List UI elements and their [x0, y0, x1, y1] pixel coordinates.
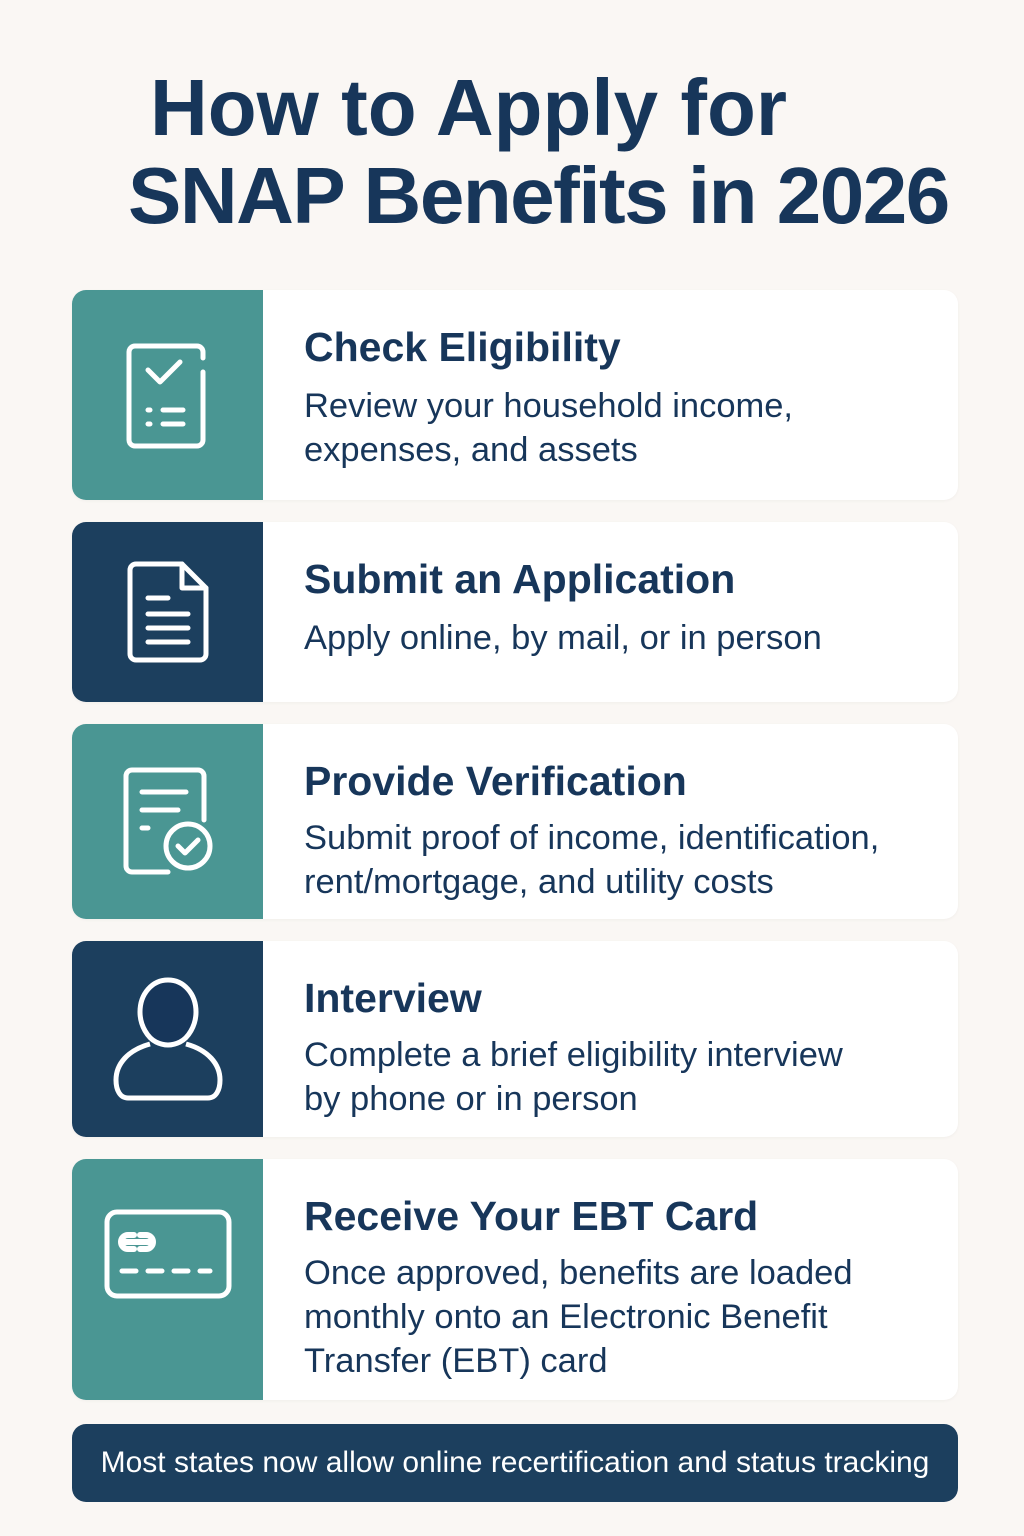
panel: interview [72, 941, 958, 1137]
panel: receive EBT card: Transfer (EBT) card [304, 1342, 608, 1380]
panel: provide verification: Submit proof of income, identification, [304, 819, 879, 857]
icon: checklist [72, 290, 263, 500]
panel: interview: Complete a brief eligibility interview [304, 1036, 843, 1074]
panel: check eligibility: Review your household income, [304, 387, 793, 425]
icon: card [72, 1159, 263, 1400]
footer callout: Most states now allow online recertification and status tracking [101, 1446, 929, 1479]
panel: receive EBT card [72, 1159, 958, 1400]
panel: check eligibility: expenses, and assets [304, 431, 638, 469]
panel: interview: by phone or in person [304, 1080, 638, 1118]
icon: person [72, 941, 263, 1137]
panel: provide verification: Provide Verification [304, 758, 687, 804]
panel: interview: Interview [304, 975, 482, 1021]
title: SNAP Benefits in 2026 [128, 151, 949, 240]
panel: submit application [72, 522, 958, 702]
title [128, 63, 949, 240]
panel: check eligibility: Check Eligibility [304, 324, 621, 370]
panel: check eligibility [72, 290, 958, 500]
panel: receive EBT card: monthly onto an Electronic Benefit [304, 1298, 828, 1336]
panel: receive EBT card: Once approved, benefits are loaded [304, 1254, 853, 1292]
panel: submit application: Submit an Application [304, 556, 735, 602]
title: How to Apply for [150, 63, 787, 152]
panel: submit application: Apply online, by mail, or in person [304, 619, 822, 657]
panel: provide verification [72, 724, 958, 919]
footer callout [72, 1424, 958, 1502]
icon: document [72, 522, 263, 702]
panel: receive EBT card: Receive Your EBT Card [304, 1193, 758, 1239]
panel: provide verification: rent/mortgage, and utility costs [304, 863, 774, 901]
icon: verified document [72, 724, 263, 919]
